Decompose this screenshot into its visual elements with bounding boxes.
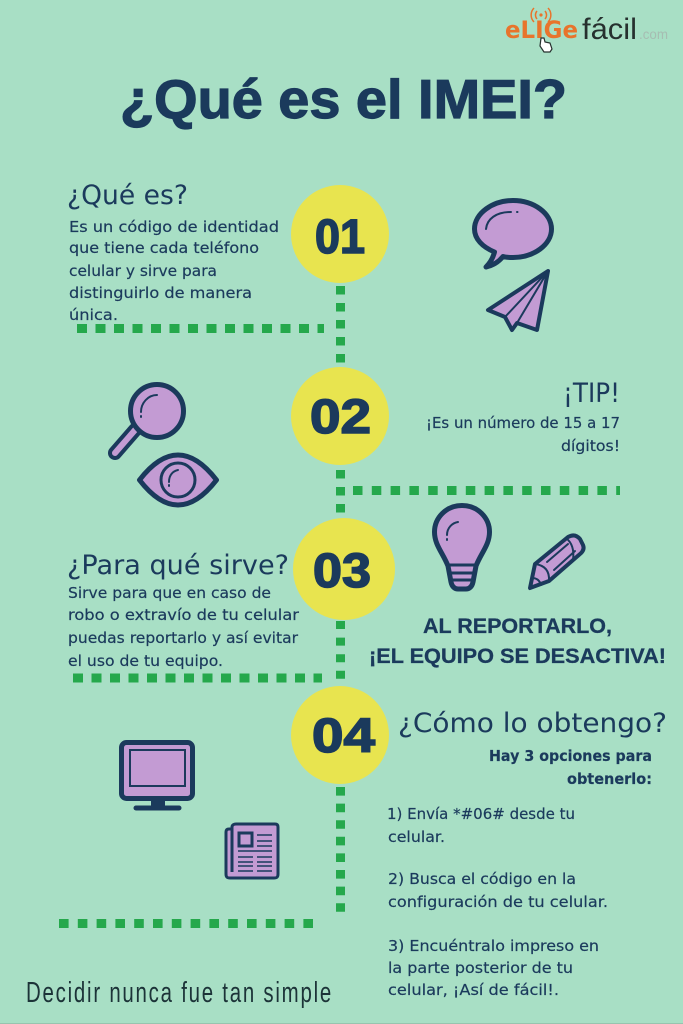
step circle 02: 02 xyxy=(310,391,371,444)
text block: cómo lo obtengo: Hay 3 opciones para xyxy=(489,747,652,765)
text block: cómo lo obtengo: obtenerlo: xyxy=(567,770,652,788)
tagline: Decidir nunca fue tan simple xyxy=(26,977,333,1009)
text block: cómo lo obtengo: celular. xyxy=(388,828,445,846)
text block: qué es: celular y sirve para xyxy=(69,262,217,280)
text block: tip xyxy=(426,378,620,455)
logo: eligefacil.com: fácil xyxy=(582,13,637,46)
text block: cómo lo obtengo xyxy=(387,708,667,999)
callout: al reportarlo: ¡EL EQUIPO SE DESACTIVA! xyxy=(369,645,666,668)
title: ¿Qué es el IMEI? xyxy=(120,68,567,130)
text block: cómo lo obtengo: configuración de tu celular. xyxy=(388,893,608,911)
text block: qué es xyxy=(67,180,279,324)
text block: cómo lo obtengo: celular, ¡Así de fácil!. xyxy=(388,981,559,999)
step circle 02 xyxy=(291,367,389,465)
text block: para qué sirve: Sirve para que en caso de xyxy=(68,584,271,602)
text block: qué es: ¿Qué es? xyxy=(67,180,188,211)
icon: magnifying glass xyxy=(115,384,184,453)
text block: para qué sirve: robo o extravío de tu celular xyxy=(68,606,300,624)
text block: qué es: Es un código de identidad xyxy=(69,218,279,236)
icon: eye xyxy=(140,455,216,505)
text block: para qué sirve: ¿Para qué sirve? xyxy=(67,550,289,581)
icon: computer monitor xyxy=(122,742,192,808)
callout: al reportarlo: AL REPORTARLO, xyxy=(423,615,612,638)
icon: newspaper xyxy=(226,824,278,878)
text block: cómo lo obtengo: 3) Encuéntralo impreso en xyxy=(388,937,599,955)
icon: speech bubble xyxy=(474,200,552,267)
icon: paper plane xyxy=(488,271,548,330)
step circle 04 xyxy=(291,686,389,784)
callout: al reportarlo xyxy=(369,615,666,668)
text block: para qué sirve xyxy=(67,550,300,670)
text block: tip: ¡TIP! xyxy=(563,378,620,409)
text block: cómo lo obtengo: la parte posterior de tu xyxy=(388,959,573,977)
timeline: dotted connectors xyxy=(59,286,620,924)
step circle 01: 01 xyxy=(315,211,365,264)
step circle 03: 03 xyxy=(313,545,371,598)
text block: tip: dígitos! xyxy=(561,437,620,455)
text block: cómo lo obtengo: 2) Busca el código en la xyxy=(388,870,576,888)
step circle 04: 04 xyxy=(312,710,375,763)
text block: cómo lo obtengo: 1) Envía *#06# desde tu xyxy=(387,805,575,823)
text block: qué es: única. xyxy=(69,306,118,324)
text block: tip: ¡Es un número de 15 a 17 xyxy=(426,414,620,432)
logo: eligefacil.com: eLIGe xyxy=(505,16,578,44)
text block: cómo lo obtengo: ¿Cómo lo obtengo? xyxy=(398,708,667,739)
text block: para qué sirve: el uso de tu equipo. xyxy=(68,652,223,670)
logo: eligefacil.com xyxy=(505,8,668,52)
icon: light bulb xyxy=(434,506,490,589)
text block: para qué sirve: puedas reportarlo y así evitar xyxy=(68,629,299,647)
step circle 03 xyxy=(293,518,395,620)
logo: eligefacil.com: .com xyxy=(639,26,668,42)
text block: qué es: que tiene cada teléfono xyxy=(69,239,259,257)
step circle 01 xyxy=(291,185,389,283)
icon: pencil xyxy=(530,535,584,588)
text block: qué es: distinguirlo de manera xyxy=(69,284,252,302)
